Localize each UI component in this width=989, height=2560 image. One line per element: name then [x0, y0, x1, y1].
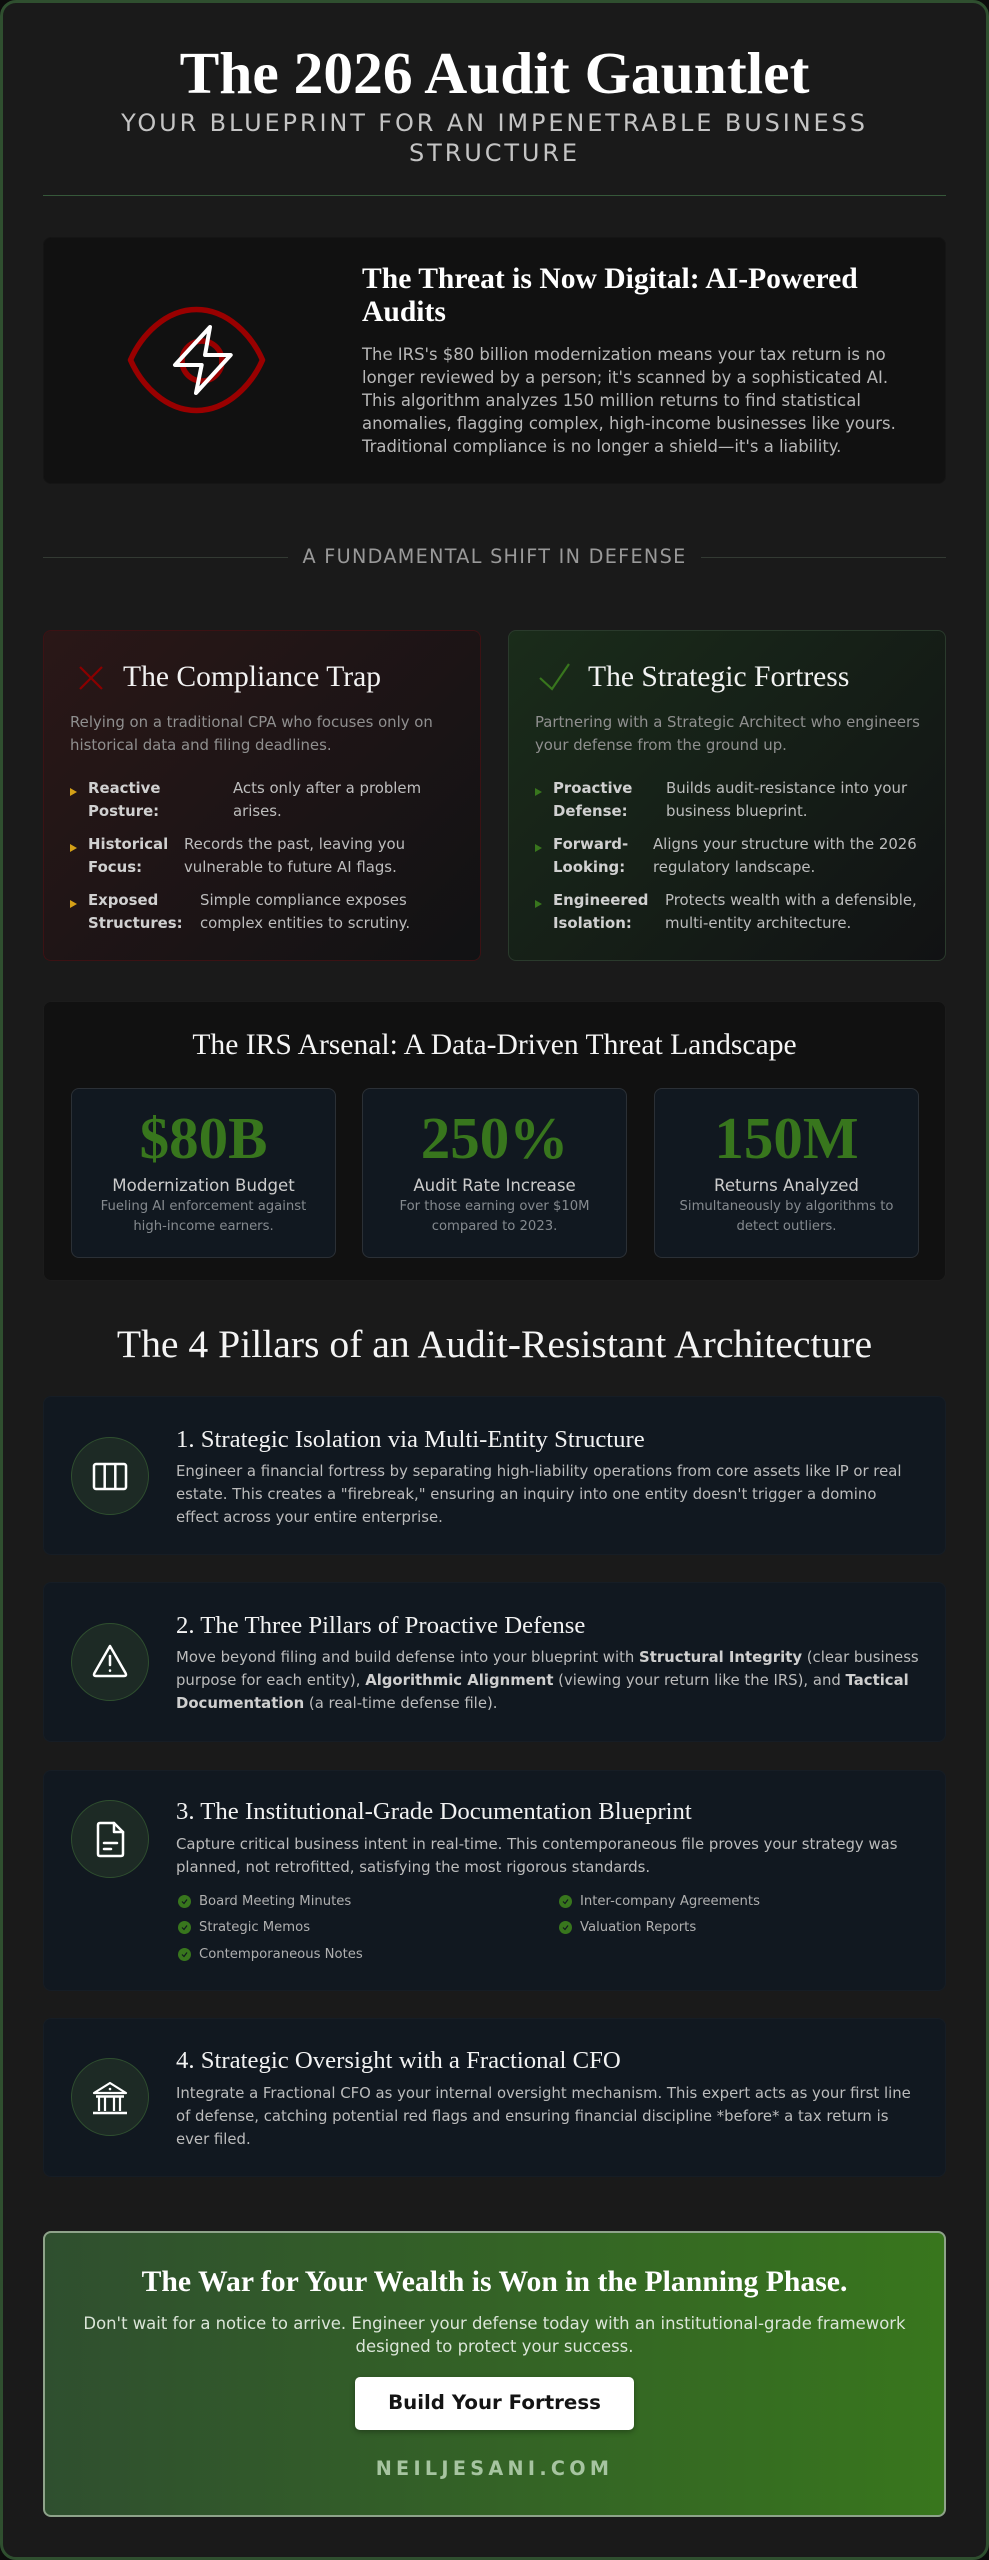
section divider label: A FUNDAMENTAL SHIFT IN DEFENSE — [302, 545, 686, 568]
pillar 1 text: estate. This creates a "firebreak," ensuring an inquiry into one entity doesn't trigger a domino — [176, 1485, 876, 1503]
pillar 4 text — [176, 2084, 911, 2148]
cta text — [83, 2314, 906, 2356]
stat note: Simultaneously by algorithms to — [680, 1199, 893, 1214]
item description — [665, 890, 917, 932]
item description — [200, 890, 410, 932]
check icon — [178, 1948, 191, 1961]
item description: Aligns your structure with the 2026 — [653, 834, 917, 852]
stat value: 150M — [714, 1105, 859, 1171]
compliance trap description — [70, 712, 433, 754]
arsenal heading: The IRS Arsenal: A Data-Driven Threat Landscape — [192, 1029, 797, 1061]
item: proactive defense: Proactive — [553, 778, 632, 796]
item: forward-looking — [553, 834, 628, 876]
pillar 2 title: 2. The Three Pillars of Proactive Defense — [176, 1612, 585, 1639]
stat note — [101, 1199, 306, 1234]
stat note: For those earning over $10M — [399, 1199, 590, 1214]
item description: multi-entity architecture. — [665, 914, 851, 932]
checklist item: Strategic Memos — [199, 1920, 310, 1935]
item: reactive posture: Posture: — [88, 802, 159, 820]
cta heading: The War for Your Wealth is Won in the Planning Phase. — [142, 2266, 847, 2298]
check icon — [178, 1921, 191, 1934]
item description: Protects wealth with a defensible, — [665, 890, 917, 908]
check icon — [559, 1895, 572, 1908]
item: historical focus: Historical — [88, 834, 168, 852]
item: proactive defense: Defense: — [553, 802, 628, 820]
item: reactive posture — [88, 778, 160, 820]
item description: complex entities to scrutiny. — [200, 914, 410, 932]
item: exposed structures — [88, 890, 183, 932]
item: engineered isolation: Isolation: — [553, 914, 632, 932]
threat paragraph — [362, 344, 896, 456]
strategic fortress description: your defense from the ground up. — [535, 736, 787, 754]
button — [355, 2377, 634, 2430]
pillar 1 title: 1. Strategic Isolation via Multi-Entity Structure — [176, 1426, 645, 1453]
checklist item: Valuation Reports — [580, 1920, 696, 1935]
pillar 4 text: Integrate a Fractional CFO as your internal oversight mechanism. This expert acts as your first line — [176, 2084, 911, 2102]
check icon — [559, 1921, 572, 1934]
pillar 2 text — [176, 1648, 919, 1712]
stat note: high-income earners. — [133, 1219, 274, 1234]
panel: irs arsenal stats — [43, 1001, 946, 1281]
icon: document — [71, 1800, 149, 1878]
item: proactive defense — [553, 778, 632, 820]
compliance trap title: The Compliance Trap — [123, 661, 381, 693]
panel: the compliance trap — [43, 630, 481, 961]
item: forward-looking: Looking: — [553, 858, 625, 876]
bullet marker — [70, 844, 77, 852]
item: exposed structures: Structures: — [88, 914, 183, 932]
item description: Records the past, leaving you — [184, 834, 405, 852]
item: engineered isolation: Engineered — [553, 890, 648, 908]
bullet marker — [535, 900, 542, 908]
checklist item: Board Meeting Minutes — [199, 1894, 351, 1909]
subtitle — [121, 109, 868, 167]
stat note: compared to 2023. — [432, 1219, 557, 1234]
stat value: 250% — [421, 1105, 568, 1171]
item description: Builds audit-resistance into your — [666, 778, 907, 796]
pillar 3 text: Capture critical business intent in real-time. This contemporaneous file proves your strategy was — [176, 1835, 897, 1853]
panel: pillar 4 — [43, 2018, 946, 2177]
strategic fortress description: Partnering with a Strategic Architect who engineers — [535, 712, 920, 730]
threat paragraph: Traditional compliance is no longer a shield—it's a liability. — [362, 436, 841, 456]
stat note: Fueling AI enforcement against — [101, 1199, 306, 1214]
website: NEILJESANI.COM — [376, 2457, 613, 2480]
icon: columns — [71, 1437, 149, 1515]
pillars heading: The 4 Pillars of an Audit-Resistant Architecture — [117, 1322, 872, 1366]
threat heading — [362, 262, 858, 328]
item description: regulatory landscape. — [653, 858, 815, 876]
item: forward-looking: Forward- — [553, 834, 628, 852]
threat paragraph: The IRS's $80 billion modernization means your tax return is no — [362, 344, 886, 364]
pillar 3 text: planned, not retrofitted, satisfying the most rigorous standards. — [176, 1858, 650, 1876]
panel: the strategic fortress — [508, 630, 946, 961]
compliance trap description: historical data and filing deadlines. — [70, 736, 332, 754]
item: historical focus — [88, 834, 168, 876]
pillar 2 text: Move beyond filing and build defense into your blueprint with Structural Integrity (clear business — [176, 1648, 919, 1666]
stat note — [399, 1199, 590, 1234]
stat label: Returns Analyzed — [714, 1176, 859, 1195]
check icon — [178, 1895, 191, 1908]
item: exposed structures: Exposed — [88, 890, 158, 908]
item description — [666, 778, 908, 820]
pillar 3 title: 3. The Institutional-Grade Documentation Blueprint — [176, 1798, 692, 1825]
item description: arises. — [233, 802, 282, 820]
item description — [233, 778, 421, 820]
item description: Acts only after a problem — [233, 778, 421, 796]
pillar 1 text: Engineer a financial fortress by separating high-liability operations from core assets like IP or real — [176, 1462, 901, 1480]
item description: Simple compliance exposes — [200, 890, 407, 908]
strategic fortress title: The Strategic Fortress — [588, 661, 849, 693]
icon: green check — [539, 664, 570, 690]
item description: vulnerable to future AI flags. — [184, 858, 397, 876]
item: historical focus: Focus: — [88, 858, 142, 876]
pillar 4 title: 4. Strategic Oversight with a Fractional CFO — [176, 2047, 621, 2074]
panel: pillar 2 — [43, 1582, 946, 1742]
stat label: Modernization Budget — [112, 1176, 295, 1195]
pillar 4 text: ever filed. — [176, 2130, 251, 2148]
item description — [653, 834, 917, 876]
pillar 1 text: effect across your entire enterprise. — [176, 1508, 443, 1526]
bullet marker — [535, 788, 542, 796]
checklist item: Contemporaneous Notes — [199, 1947, 363, 1962]
stat card: 250% — [362, 1088, 627, 1258]
stat value: $80B — [140, 1105, 267, 1171]
bullet marker — [70, 900, 77, 908]
item: engineered isolation — [553, 890, 648, 932]
item: reactive posture: Reactive — [88, 778, 160, 796]
strategic fortress description — [535, 712, 920, 754]
cta text: designed to protect your success. — [356, 2336, 633, 2356]
stat label: Audit Rate Increase — [413, 1176, 576, 1195]
button: Build Your Fortress — [388, 2391, 601, 2414]
cta text: Don't wait for a notice to arrive. Engineer your defense today with an institutional-grade framework — [83, 2314, 906, 2332]
bullet marker — [70, 788, 77, 796]
stat card: 150M — [654, 1088, 919, 1258]
pillar 4 text: of defense, catching potential red flags and ensuring financial discipline *before* a tax return is — [176, 2107, 888, 2125]
threat paragraph: This algorithm analyzes 150 million returns to find statistical — [362, 390, 861, 410]
panel: call to action — [43, 2231, 946, 2517]
subtitle: STRUCTURE — [409, 139, 580, 167]
subtitle: YOUR BLUEPRINT FOR AN IMPENETRABLE BUSINESS — [121, 109, 868, 137]
icon: eye with lightning bolt — [128, 306, 266, 414]
panel: threat — [43, 237, 946, 484]
threat heading: Audits — [362, 296, 446, 328]
checklist item: Inter-company Agreements — [580, 1894, 760, 1909]
pillar 2 text: Documentation (a real-time defense file). — [176, 1694, 497, 1712]
icon: institution building — [71, 2058, 149, 2136]
stat note: detect outliers. — [737, 1219, 836, 1234]
icon: warning triangle — [71, 1623, 149, 1701]
compliance trap description: Relying on a traditional CPA who focuses only on — [70, 712, 433, 730]
bullet marker — [535, 844, 542, 852]
stat card: $80B — [71, 1088, 336, 1258]
panel: pillar 3 — [43, 1770, 946, 1991]
threat paragraph: longer reviewed by a person; it's scanned by a sophisticated AI. — [362, 368, 888, 386]
pillar 1 text — [176, 1462, 901, 1526]
threat heading: The Threat is Now Digital: AI-Powered — [362, 262, 858, 294]
pillar 2 text: purpose for each entity), Algorithmic Alignment (viewing your return like the IRS), and Tactical — [176, 1671, 909, 1689]
stat note — [680, 1199, 893, 1234]
pillar 3 text — [176, 1835, 897, 1876]
item description — [184, 834, 405, 876]
item description: business blueprint. — [666, 802, 808, 820]
icon: red x — [79, 666, 103, 690]
threat paragraph: anomalies, flagging complex, high-income businesses like yours. — [362, 414, 896, 432]
title: The 2026 Audit Gauntlet — [180, 40, 809, 106]
panel: pillar 1 — [43, 1396, 946, 1555]
